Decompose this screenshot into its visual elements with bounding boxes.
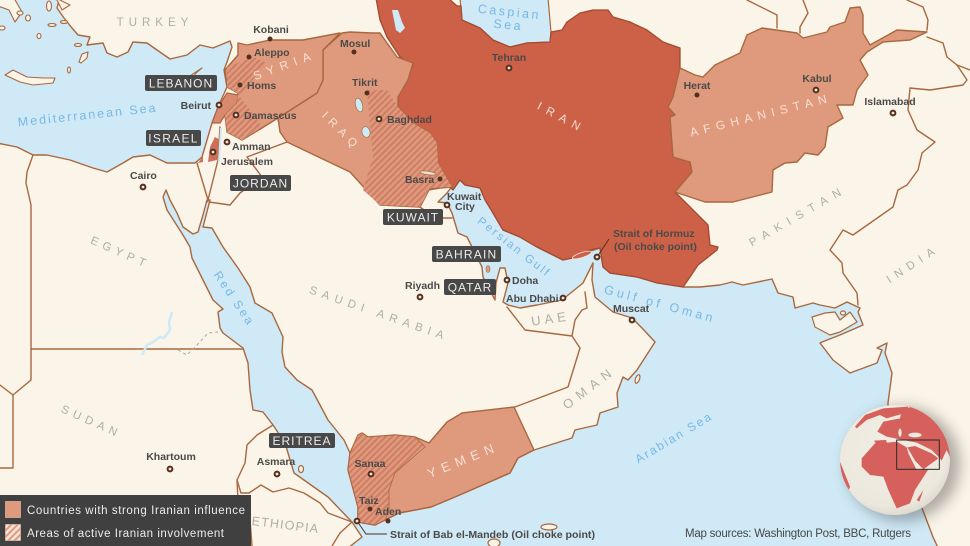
country: Iran (376, 0, 718, 287)
globe shadow (846, 407, 960, 521)
country names on land: SAUDI ARABIA (307, 285, 450, 344)
city names: Tikrit (352, 77, 378, 89)
country names on highlighted countries: YEMEN (425, 439, 501, 481)
country names on land: INDIA (885, 243, 942, 286)
country: Syria (225, 33, 340, 140)
city names (130, 24, 916, 541)
country: Afghanistan (668, 7, 927, 202)
country names on land: ETHIOPIA (251, 514, 320, 536)
sea names: Arabian Sea (633, 409, 715, 466)
city names: Taiz (359, 495, 379, 507)
city names: City (455, 201, 475, 213)
legend panel: Areas of active Iranian involvement (27, 528, 225, 540)
city names: Herat (684, 80, 711, 92)
city names: Tehran (492, 52, 526, 64)
country names on highlighted countries: AFGHANISTAN (688, 91, 834, 140)
city names: Asmara (257, 456, 295, 468)
legend swatch: active involvement (6, 524, 20, 540)
legend swatch: strong influence (6, 502, 20, 518)
city names: (Oil choke point) (614, 241, 697, 253)
sea names: Mediterranean Sea (17, 101, 158, 129)
city names: Riyadh (405, 280, 440, 292)
city names: Aleppo (254, 47, 290, 59)
land: Kutch and small islands (298, 311, 857, 546)
city names: Islamabad (864, 96, 916, 108)
city names: Beirut (181, 100, 211, 112)
hatched area: central and southern Iraq (363, 90, 452, 207)
legend panel: Countries with strong Iranian influence (27, 505, 245, 517)
bahrain island (486, 266, 490, 272)
city markers (141, 36, 895, 524)
country names on land: EGYPT (89, 235, 152, 272)
island: Qeshm (572, 250, 592, 260)
city names: Sanaa (355, 458, 386, 470)
dashed Egypt-Sudan administrative line (178, 332, 218, 355)
tag: Israel: ISRAEL (148, 132, 199, 146)
country names on land: OMAN (560, 362, 619, 412)
hatched area: western Yemen (348, 433, 425, 525)
country names on land: UAE (530, 308, 571, 329)
city names: Homs (247, 80, 276, 92)
city names: Muscat (613, 303, 650, 315)
palestinian territories (198, 137, 220, 163)
city names: Jerusalem (221, 156, 273, 168)
leader: Strait of Hormuz (597, 239, 609, 257)
city names: Mosul (340, 38, 370, 50)
city names: Basra (405, 174, 434, 186)
city names: Abu Dhabi (506, 293, 559, 305)
city names: Khartoum (146, 451, 196, 463)
hatched area: western Syria (225, 57, 267, 140)
country names on highlighted countries: IRAQ (319, 110, 363, 154)
sea: Red Sea, Persian Gulf and Arabian Sea (163, 178, 940, 546)
city names: Damascus (244, 110, 297, 122)
city names: Strait of Hormuz (613, 228, 695, 240)
city names: Baghdad (387, 114, 432, 126)
country names on highlighted countries (251, 47, 834, 481)
sea names: Caspian (477, 2, 542, 22)
city names: Doha (512, 275, 538, 287)
tag: Eritrea: ERITREA (272, 434, 332, 448)
city names: Strait of Bab el-Mandeb (Oil choke point) (390, 529, 595, 541)
globe inset (839, 405, 953, 515)
city names: Cairo (130, 170, 157, 182)
Jordan valley and lakes in Iraq (218, 97, 436, 176)
country: Yemen (348, 407, 534, 525)
city names: Kobani (253, 24, 289, 36)
country names on land: SUDAN (59, 404, 123, 441)
tag: Jordan: JORDAN (233, 176, 288, 190)
country: Iraq (278, 32, 452, 207)
sea names: Persian Gulf (475, 215, 553, 280)
leader: Strait of Bab el-Mandeb (357, 521, 387, 534)
sea: Mediterranean (0, 0, 232, 172)
sea names: Gulf of Oman (603, 282, 717, 326)
country names on land: TURKEY (117, 17, 193, 29)
lake Urmia (392, 10, 405, 33)
country names on land: PAKISTAN (747, 183, 850, 249)
country: Lebanon (212, 93, 238, 123)
sea names (17, 2, 717, 466)
city names: Kuwait (447, 191, 482, 203)
lake and nile (142, 312, 172, 355)
legend panel (0, 495, 251, 546)
tag: Kuwait: KUWAIT (387, 210, 439, 224)
city names: Aden (375, 506, 401, 518)
country names on highlighted countries: IRAN (535, 100, 588, 136)
city names: Kabul (802, 73, 832, 85)
country names on highlighted countries: SYRIA (251, 47, 318, 83)
sea names: Red Sea (211, 269, 258, 329)
tag: Lebanon: LEBANON (149, 76, 213, 90)
islands of the Mediterranean (0, 0, 202, 90)
city names: Amman (232, 141, 271, 153)
sources note: Map sources: Washington Post, BBC, Rutgers (685, 528, 911, 540)
tag: Bahrain: BAHRAIN (436, 248, 497, 262)
tag: Qatar: QATAR (448, 280, 492, 294)
sea names: Sea (493, 17, 524, 33)
sea: Caspian (460, 0, 551, 47)
